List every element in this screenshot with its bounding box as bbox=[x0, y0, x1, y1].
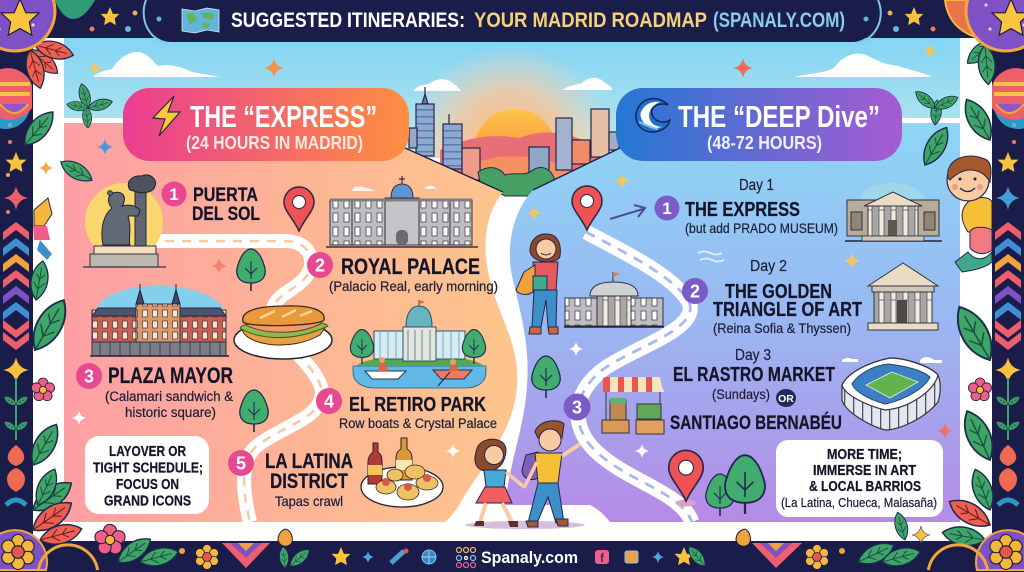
leaves on white band, left bbox=[18, 82, 114, 508]
icon: brand dots bbox=[456, 548, 476, 568]
step 2 label: 2 bbox=[315, 256, 325, 276]
arrow to step 1 bbox=[610, 205, 645, 219]
panel heading: Deep Dive bbox=[616, 88, 902, 161]
step badge 3 bbox=[564, 394, 590, 420]
icon: royal palace bbox=[326, 176, 478, 247]
title banner: YOUR MADRID ROADMAP bbox=[474, 9, 707, 32]
icon: market stall bbox=[602, 377, 664, 434]
icon: Plaza Mayor building bbox=[90, 284, 229, 356]
icon: map bbox=[182, 8, 219, 33]
icon: pin at route start bbox=[572, 186, 602, 230]
footer icons: f bbox=[600, 551, 605, 565]
step 5 label: DISTRICT bbox=[270, 470, 348, 493]
icon: tree bbox=[240, 390, 268, 432]
step 3 label bbox=[76, 363, 233, 420]
icon: pair of trees bbox=[706, 455, 765, 516]
callout: Deep Dive summary: & LOCAL BARRIOS bbox=[809, 479, 921, 495]
step label: Day 2: (Reina Sofia & Thyssen) bbox=[713, 320, 851, 336]
decorative wavy lines bbox=[698, 252, 724, 262]
icon: calamari sandwich bbox=[234, 306, 332, 359]
step 5 label: 5 bbox=[236, 454, 246, 474]
callout: Deep Dive summary bbox=[776, 440, 943, 517]
step 2 label bbox=[307, 252, 498, 294]
icon: tree bbox=[237, 249, 265, 291]
leaves on white band, right bbox=[912, 88, 1001, 513]
step 1 label bbox=[162, 182, 260, 225]
callout: Deep Dive summary: MORE TIME; bbox=[827, 447, 902, 463]
road: express route bbox=[155, 241, 322, 522]
towers bbox=[409, 87, 619, 180]
characters: walking children bbox=[465, 421, 585, 529]
step label: Day 3: (Sundays) bbox=[712, 386, 770, 402]
step label: Day 2: Day 2 bbox=[750, 258, 787, 275]
icon: tapas plate and bottles bbox=[361, 438, 443, 507]
icon: Santiago Bernabéu stadium bbox=[842, 357, 942, 430]
step label: Day 3: Day 3 bbox=[735, 347, 771, 364]
step 5 label: LA LATINA bbox=[265, 450, 353, 473]
panel: sky bbox=[64, 38, 960, 158]
step 4 label: 4 bbox=[324, 392, 334, 412]
step label: Day 1: Day 1 bbox=[739, 177, 774, 194]
step 2 label: ROYAL PALACE bbox=[341, 254, 480, 279]
step label: Day 1: THE EXPRESS bbox=[685, 199, 800, 221]
title banner: SUGGESTED ITINERARIES: bbox=[231, 9, 465, 32]
border kid right bbox=[947, 156, 992, 272]
panel: left land (Express) bbox=[64, 123, 517, 522]
icon: bear and tree statue bbox=[83, 175, 166, 267]
icon: wave bbox=[636, 99, 670, 132]
step label: Day 2: TRIANGLE OF ART bbox=[713, 299, 862, 321]
skyline with sunset bbox=[409, 87, 619, 196]
title banner: (SPANALY.COM) bbox=[713, 9, 845, 32]
left border ornaments bbox=[0, 68, 32, 505]
border kid left bbox=[33, 198, 52, 260]
step label: Day 3: EL RASTRO MARKET bbox=[673, 364, 835, 386]
panel heading: Deep Dive: THE “DEEP Dive” bbox=[678, 99, 880, 134]
horizon strips bbox=[64, 118, 960, 123]
callout: Deep Dive summary: IMMERSE IN ART bbox=[813, 463, 916, 479]
step 3 label: PLAZA MAYOR bbox=[108, 363, 233, 388]
top border decoration bbox=[90, 7, 936, 32]
icon: museum bbox=[564, 272, 664, 327]
callout: Express summary bbox=[85, 436, 209, 514]
step label: Day 1: 1 bbox=[662, 199, 672, 218]
footer brand: Spanaly.com bbox=[481, 548, 578, 567]
icon: lightning bolt bbox=[153, 96, 180, 136]
step badge 3: 3 bbox=[572, 398, 582, 418]
step 1 label: DEL SOL bbox=[192, 204, 260, 225]
trees band bbox=[478, 168, 557, 196]
callout: Express summary: GRAND ICONS bbox=[104, 494, 191, 510]
callout: Express summary: LAYOVER OR bbox=[109, 444, 186, 460]
callout: Express summary: FOCUS ON bbox=[116, 477, 179, 493]
step label: Day 1: (but add PRADO MUSEUM) bbox=[685, 220, 838, 236]
sun bbox=[474, 109, 556, 191]
horizon edge strokes bbox=[405, 148, 620, 192]
panel heading: Express: THE “EXPRESS” bbox=[190, 99, 377, 134]
icon: pin at route end bbox=[669, 450, 703, 506]
step label: Day 1 bbox=[654, 177, 838, 236]
step 5 label: Tapas crawl bbox=[275, 493, 343, 509]
title banner bbox=[144, 0, 881, 43]
clouds bbox=[93, 52, 932, 91]
sparkles bbox=[39, 44, 953, 544]
icon: Greek-style art museum bbox=[868, 263, 938, 330]
step label: Day 3: OR bbox=[778, 393, 794, 405]
panel heading: Deep Dive: (48-72 HOURS) bbox=[707, 133, 822, 153]
icon: El Retiro lake and Crystal Palace bbox=[350, 300, 486, 388]
girl bbox=[474, 439, 524, 527]
step 2 label: (Palacio Real, early morning) bbox=[329, 279, 498, 294]
step 4 label: Row boats & Crystal Palace bbox=[339, 416, 497, 431]
footer floral right bbox=[685, 511, 922, 570]
step 5 label bbox=[228, 450, 353, 509]
right border ornaments bbox=[992, 68, 1024, 505]
callout: Express summary: TIGHT SCHEDULE; bbox=[93, 460, 203, 476]
panel heading: Express: (24 HOURS IN MADRID) bbox=[186, 133, 363, 153]
hills bbox=[440, 133, 610, 195]
road: deep dive route bbox=[578, 232, 692, 522]
footer floral left bbox=[95, 524, 313, 570]
icon: woman traveller bbox=[516, 234, 560, 334]
callout: Deep Dive summary: (La Latina, Chueca, Malasaña) bbox=[781, 495, 937, 510]
step 3 label: historic square) bbox=[125, 405, 216, 420]
icon: tree bbox=[532, 356, 560, 398]
step label: Day 3 bbox=[670, 347, 842, 434]
step 1 label: PUERTA bbox=[193, 185, 258, 206]
panel heading: Express bbox=[123, 88, 409, 161]
step label: Day 2: THE GOLDEN bbox=[725, 281, 832, 303]
step 4 label bbox=[316, 388, 497, 431]
step 3 label: 3 bbox=[84, 366, 94, 386]
icon: map pin bbox=[284, 187, 314, 231]
step 3 label: (Calamari sandwich & bbox=[105, 389, 233, 404]
panel: right land (Deep Dive) bbox=[505, 123, 960, 522]
icon: Prado Museum bbox=[845, 183, 942, 241]
step 1 label: 1 bbox=[169, 185, 179, 204]
boy bbox=[522, 421, 580, 527]
footer icons bbox=[332, 547, 694, 565]
step label: Day 2: 2 bbox=[690, 282, 700, 302]
step label: Day 2 bbox=[682, 258, 862, 336]
step label: Day 3: SANTIAGO BERNABÉU bbox=[670, 412, 842, 434]
step 4 label: EL RETIRO PARK bbox=[349, 394, 486, 416]
